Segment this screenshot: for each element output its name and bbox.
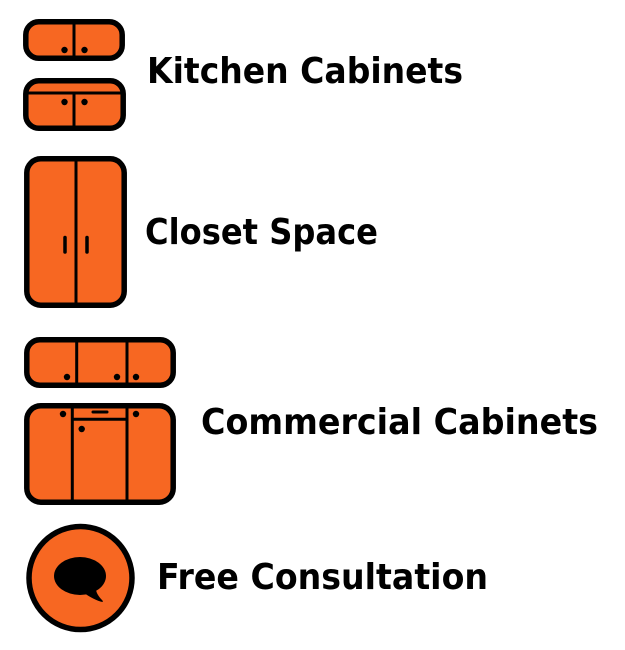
heading: Free Consultation: Free Consultation bbox=[157, 557, 488, 598]
heading: Commercial Cabinets: Commercial Cabinets bbox=[201, 402, 598, 443]
icon: kitchen base cabinet bbox=[26, 81, 123, 128]
heading: Closet Space: Closet Space bbox=[145, 212, 378, 253]
icon: commercial base cabinet bbox=[27, 405, 173, 502]
icon: commercial wall cabinet bbox=[27, 340, 173, 385]
heading: Kitchen Cabinets: Kitchen Cabinets bbox=[147, 51, 463, 92]
icon: kitchen wall cabinet bbox=[26, 22, 122, 58]
icon: speech bubble circle bbox=[29, 526, 132, 630]
icon: closet bbox=[27, 159, 124, 305]
